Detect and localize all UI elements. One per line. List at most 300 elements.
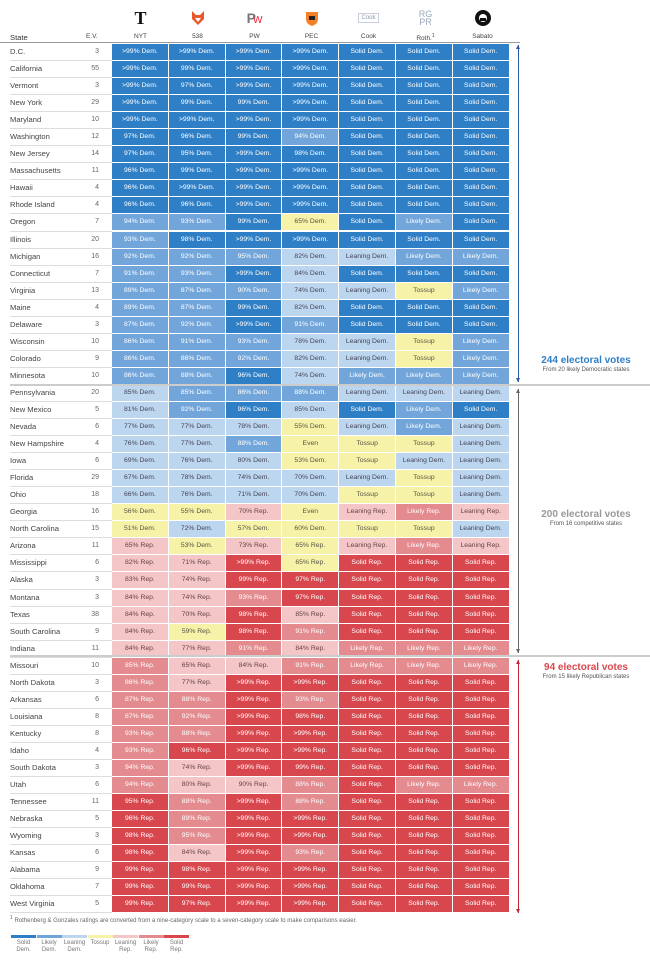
row: Iowa: 76% Dem. [181,457,213,464]
header row: Cook [361,33,376,40]
row: California: 99% Dem. [181,65,213,72]
row: Missouri: Likely Rep. [350,662,384,669]
row: Connecticut: 93% Dem. [181,270,213,277]
row: New Mexico: New Mexico [10,405,51,414]
row: Arizona: Likely Rep. [407,542,441,549]
row: New Hampshire: 4 [95,440,99,447]
legend: Leaning [115,940,136,946]
row: Utah: 6 [95,781,99,788]
row: Pennsylvania: 85% Dem. [181,389,213,396]
row: Georgia: 16 [91,508,99,515]
row: Washington [10,129,509,146]
row: Delaware: Delaware [10,320,42,329]
row: California: California [10,64,42,73]
row: Louisiana: Louisiana [10,712,43,721]
row: Kansas: 93% Rep. [295,849,325,856]
row: Vermont: >99% Dem. [122,82,158,89]
row: Washington: 12 [91,133,99,140]
row: Kentucky: Solid Rep. [465,730,496,737]
row: California: Solid Dem. [407,65,440,72]
row: Illinois: Solid Dem. [350,236,384,243]
row: South Carolina: South Carolina [10,627,60,636]
row: Oklahoma: >99% Rep. [293,883,327,890]
row: Missouri: 65% Rep. [182,662,212,669]
row: Ohio: Tossup [413,491,435,498]
row: Wyoming: Solid Rep. [351,832,383,839]
row: West Virginia: 5 [95,900,99,907]
row: New York: Solid Dem. [407,99,440,106]
row: Nebraska: 89% Rep. [182,815,212,822]
row: Connecticut: Solid Dem. [407,270,440,277]
row: Missouri: 85% Rep. [125,662,155,669]
row: Alabama: Solid Rep. [408,866,440,873]
row: Missouri: 91% Rep. [295,662,325,669]
row: West Virginia: >99% Rep. [237,900,270,907]
row: Illinois: 20 [91,236,99,243]
row: Florida: Florida [10,473,33,482]
row: Oklahoma: >99% Rep. [237,883,270,890]
row: Minnesota: 74% Dem. [294,372,326,379]
row: Florida: Leaning Dem. [346,474,388,481]
row: Illinois: >99% Dem. [292,236,328,243]
row: South Dakota: Solid Rep. [465,764,496,771]
row: New Jersey: Solid Dem. [407,150,440,157]
row: South Carolina: Solid Rep. [351,628,383,635]
row: South Dakota: >99% Rep. [237,764,270,771]
row: New Jersey: Solid Dem. [464,150,497,157]
row: Colorado: 82% Dem. [294,355,326,362]
row: Virginia: Leaning Dem. [346,287,388,294]
row: Idaho: 96% Rep. [182,747,212,754]
row: Pennsylvania: Pennsylvania [10,388,55,397]
row: Kentucky: 93% Rep. [125,730,155,737]
row: Maryland: >99% Dem. [292,116,328,123]
legend: Dem. [42,947,56,953]
row: Wyoming: >99% Rep. [237,832,270,839]
row: New York: >99% Dem. [122,99,158,106]
row: Mississippi: 82% Rep. [125,559,155,566]
row: Missouri [0,658,520,675]
row: West Virginia: West Virginia [10,899,54,908]
row: Nebraska: >99% Rep. [237,815,270,822]
row: Connecticut: 7 [95,270,99,277]
row: Arizona: 65% Rep. [295,542,325,549]
row: Massachusetts: 99% Dem. [181,167,213,174]
row: New Hampshire: 77% Dem. [181,440,213,447]
label: 200 electoral votes: From 16 competitive states [550,521,622,527]
row: Wisconsin: 93% Dem. [238,338,269,345]
row: Nevada: 55% Dem. [294,423,326,430]
row: Maryland: >99% Dem. [122,116,158,123]
row: D.C.: >99% Dem. [236,48,271,55]
row: Ohio [10,487,509,504]
row: Alaska: 74% Rep. [182,576,212,583]
row: Florida: 67% Dem. [124,474,156,481]
row: Indiana: Indiana [10,644,35,653]
row: Nebraska: Solid Rep. [351,815,383,822]
row: Virginia: Likely Dem. [463,287,498,294]
row: Rhode Island: 96% Dem. [181,201,213,208]
row: South Carolina: Solid Rep. [465,628,496,635]
row: New Mexico: 81% Dem. [124,406,156,413]
row: Tennessee: Solid Rep. [465,798,496,805]
row: Arkansas: 6 [95,696,99,703]
row: New Mexico: Solid Dem. [350,406,384,413]
row: Wisconsin: 86% Dem. [124,338,156,345]
row: Virginia: 90% Dem. [238,287,269,294]
row: Arkansas: Solid Rep. [465,696,496,703]
row: Maryland: 10 [91,116,99,123]
row: West Virginia: 99% Rep. [125,900,155,907]
row: Michigan: 92% Dem. [124,253,156,260]
row: Indiana: 91% Rep. [239,645,268,652]
icon: PEC [306,12,318,26]
row: D.C.: >99% Dem. [179,48,215,55]
row: Georgia: Leaning Rep. [347,508,387,515]
row: Maryland [10,112,509,129]
row: Maryland: Solid Dem. [464,116,497,123]
row: Louisiana: 92% Rep. [182,713,212,720]
row: Tennessee [0,794,520,811]
row: New Jersey: >99% Dem. [236,150,271,157]
row: Nebraska: 96% Rep. [125,815,155,822]
row: Massachusetts: Solid Dem. [464,167,497,174]
row: Minnesota: Likely Dem. [463,372,498,379]
row: South Carolina: 59% Rep. [182,628,212,635]
row: Utah: 94% Rep. [125,781,155,788]
row: South Dakota: Solid Rep. [408,764,440,771]
row: Michigan [10,249,509,266]
arrow: republican range [518,660,519,913]
row: Delaware: Solid Dem. [464,321,497,328]
row: Wyoming: Wyoming [10,831,42,840]
row: Minnesota: Minnesota [10,371,45,380]
row: Texas: Solid Rep. [465,611,496,618]
row: Pennsylvania: Leaning Dem. [346,389,388,396]
row: Oklahoma: Solid Rep. [408,883,440,890]
row: Connecticut: Solid Dem. [350,270,384,277]
row: Nevada: 77% Dem. [181,423,213,430]
row: Maine: 82% Dem. [294,304,326,311]
row: Minnesota: 96% Dem. [238,372,269,379]
legend: Dem. [16,947,31,953]
legend: Rep. [170,947,183,953]
row: Minnesota: Likely Dem. [406,372,442,379]
row: Illinois: Solid Dem. [464,236,497,243]
row: Nebraska [0,811,520,828]
row: Virginia [10,283,509,300]
row: Pennsylvania [10,386,509,402]
row: Virginia: Virginia [10,286,35,295]
row: New Mexico: 92% Dem. [181,406,213,413]
row: Maine: 4 [95,304,99,311]
row: Michigan: Likely Dem. [406,253,442,260]
row: California: >99% Dem. [292,65,328,72]
row: New Jersey: 97% Dem. [124,150,156,157]
row: Massachusetts: >99% Dem. [236,167,271,174]
row: North Carolina: 60% Dem. [294,525,326,532]
row: North Carolina: Tossup [356,525,378,532]
row: Pennsylvania: 85% Dem. [124,389,156,396]
row: Utah: Solid Rep. [351,781,383,788]
row: Rhode Island: Solid Dem. [464,201,497,208]
row: California: Solid Dem. [350,65,384,72]
row: New York [10,95,509,112]
row: Kansas: Solid Rep. [465,849,496,856]
row: Oklahoma: Solid Rep. [351,883,383,890]
label: 244 electoral votes: From 20 likely Democratic states [542,367,630,373]
row: Hawaii: 96% Dem. [124,184,156,191]
row: New York: 99% Dem. [181,99,213,106]
row: North Dakota: >99% Rep. [293,679,327,686]
row: Montana: Solid Rep. [465,594,496,600]
row: Colorado [10,351,509,368]
icon: Rothenberg [419,9,432,27]
legend: Leaning [64,940,85,946]
row: Oregon: Likely Dem. [406,218,442,225]
row: Illinois: Solid Dem. [407,236,440,243]
label: 94 electoral votes [522,662,650,680]
row: Colorado: 9 [95,355,99,362]
row: Rhode Island: Solid Dem. [407,201,440,208]
row: New Hampshire [10,436,509,453]
row: Arizona: Leaning Rep. [347,542,387,549]
row: Alabama: 9 [95,866,99,873]
row: South Carolina [0,624,520,641]
row: Massachusetts [10,163,509,180]
row: New Mexico: 96% Dem. [238,406,269,413]
row: Maryland: Maryland [10,115,41,124]
row: Nebraska: Solid Rep. [465,815,496,822]
header row [0,0,520,43]
row: Arizona: 11 [92,542,99,549]
row: New Jersey: 14 [91,150,99,157]
row: D.C. [10,44,509,61]
row: Oregon: 99% Dem. [238,218,269,225]
row: California: 55 [91,65,99,72]
legend: Likely [41,940,57,946]
row: Idaho: >99% Rep. [237,747,270,754]
row: Vermont: 3 [95,82,99,89]
row: California: Solid Dem. [464,65,497,72]
row: Massachusetts: >99% Dem. [292,167,328,174]
row: Kentucky: 88% Rep. [182,730,212,737]
row: North Dakota: Solid Rep. [351,679,383,686]
row: Arkansas: >99% Rep. [237,696,270,703]
header row: 538 [192,33,203,40]
row: Hawaii: 4 [95,184,99,191]
row: North Dakota: 3 [95,679,99,686]
row: Nevada: 77% Dem. [124,423,156,430]
row: Ohio: 66% Dem. [124,491,156,498]
row: Arizona: 65% Rep. [125,542,155,549]
row: Oregon: Solid Dem. [464,218,497,225]
arrow: competitive range [518,389,519,653]
row: Florida: 78% Dem. [181,474,213,481]
row: North Carolina: North Carolina [10,524,59,533]
icon: Rothenberg: RG [419,9,432,19]
row: Tennessee: >99% Rep. [237,798,270,805]
row: Kansas: Solid Rep. [351,849,383,856]
row: Arkansas [0,692,520,709]
row: Florida: 74% Dem. [238,474,269,481]
row: Mississippi: 6 [95,559,99,566]
row: Massachusetts: 11 [92,167,99,174]
row: Idaho: 93% Rep. [125,747,155,754]
row: Maryland: >99% Dem. [179,116,215,123]
row: Hawaii: Solid Dem. [350,184,384,191]
row: Arizona [10,538,509,555]
row: Utah: 80% Rep. [182,781,212,788]
row: Texas: Solid Rep. [408,611,440,618]
row: Tennessee: Solid Rep. [408,798,440,805]
row: Michigan: Michigan [10,252,40,261]
row: Iowa: Leaning Dem. [460,457,502,464]
row: North Carolina: 15 [91,525,99,532]
row: Michigan: 95% Dem. [238,253,269,260]
legend: Solid [170,940,183,946]
row: North Carolina: Tossup [413,525,435,532]
row: Mississippi: Solid Rep. [351,559,383,566]
row: Kentucky [0,726,520,743]
row: Maine: 87% Dem. [181,304,213,311]
row: Alaska: Solid Rep. [408,576,440,583]
row: Pennsylvania: 88% Dem. [294,389,326,396]
row: Delaware: 87% Dem. [124,321,156,328]
row: Tennessee: 88% Rep. [295,798,325,805]
row: North Dakota: 86% Rep. [125,679,155,686]
row: Arkansas: 88% Rep. [182,696,212,703]
row: Wyoming: >99% Rep. [293,832,327,839]
row: Nevada: 6 [95,423,99,430]
legend: Likely [143,940,159,946]
row: Arkansas: 87% Rep. [125,696,155,703]
row: Connecticut: Solid Dem. [464,270,497,277]
row: North Carolina [10,521,509,538]
row: Oklahoma: 99% Rep. [182,883,212,890]
row: Arkansas: Solid Rep. [408,696,440,703]
row: Maryland: Solid Dem. [350,116,384,123]
row: Wyoming: 95% Rep. [182,832,212,839]
row: Vermont: 97% Dem. [181,82,213,89]
row: Delaware: 3 [95,321,99,328]
row: Tennessee: 88% Rep. [182,798,212,805]
row: Wisconsin: Wisconsin [10,337,45,346]
row: Vermont: Solid Dem. [407,82,440,89]
row: D.C.: >99% Dem. [292,48,328,55]
row: Louisiana: >99% Rep. [237,713,270,720]
row: Mississippi: 65% Rep. [295,559,325,566]
row: Virginia: 74% Dem. [294,287,326,294]
row: Oregon [10,214,509,232]
row: Utah: 90% Rep. [239,781,268,788]
row: Wisconsin: 10 [91,338,99,345]
row: Connecticut [10,266,509,283]
row: Kentucky: Solid Rep. [408,730,440,737]
row: Colorado: 92% Dem. [238,355,269,362]
row: Rhode Island [10,197,509,214]
row: Washington: 97% Dem. [124,133,156,140]
row: Colorado: Likely Dem. [463,355,498,362]
row: New Mexico: 85% Dem. [294,406,326,413]
row: North Dakota: 77% Rep. [182,679,212,686]
row: Nevada: Nevada [10,422,36,431]
row: Connecticut: 84% Dem. [294,270,326,277]
row: Nebraska: >99% Rep. [293,815,327,822]
row: Pennsylvania: Leaning Dem. [403,389,445,396]
row: Maine: Solid Dem. [407,304,440,311]
row: Kansas [0,845,520,862]
row: Louisiana: 98% Rep. [295,713,325,720]
row: Idaho: Solid Rep. [351,747,383,754]
row: Kentucky: Solid Rep. [351,730,383,737]
row: West Virginia: Solid Rep. [465,900,496,907]
row: Illinois: Illinois [10,235,31,244]
row: California: >99% Dem. [236,65,271,72]
row: New York: New York [10,98,42,107]
row: Tennessee: Tennessee [10,797,47,806]
row: West Virginia [0,896,520,913]
row: North Dakota: Solid Rep. [465,679,496,686]
row: Colorado: Colorado [10,354,41,363]
row: Iowa: 69% Dem. [124,457,156,464]
row: New York: 99% Dem. [238,99,269,106]
row: Michigan: 82% Dem. [294,253,326,260]
row: Connecticut: >99% Dem. [236,270,271,277]
row: New Jersey [10,146,509,163]
legend [11,935,190,954]
row: Nevada: Leaning Dem. [460,423,502,430]
row: Florida: Tossup [413,474,435,481]
row: Georgia [10,504,509,521]
row: Montana: Solid Rep. [408,594,440,600]
row: Virginia: 13 [91,287,99,294]
row: Kansas: Kansas [10,848,35,857]
row: Utah: Utah [10,780,26,789]
row: Missouri: Missouri [10,661,38,670]
row: Alabama: Alabama [10,865,40,874]
row: Georgia: Even [303,508,318,515]
row: Wisconsin: Tossup [413,338,435,345]
row: Nebraska: Solid Rep. [408,815,440,822]
label: 244 electoral votes [522,355,650,373]
row: Massachusetts: 96% Dem. [124,167,156,174]
row: Kansas: 84% Rep. [182,849,212,856]
row: Arizona: 73% Rep. [239,542,268,549]
row: Louisiana: 8 [95,713,99,720]
row: Virginia: 89% Dem. [124,287,156,294]
row: Tennessee: 11 [92,798,99,805]
row: Minnesota: 86% Dem. [124,372,156,379]
row: Vermont: Solid Dem. [350,82,384,89]
row: Missouri: 84% Rep. [239,662,268,669]
row: Michigan: Likely Dem. [463,253,498,260]
row: North Dakota [0,675,520,692]
row: Oregon: Solid Dem. [350,218,384,225]
row: D.C.: Solid Dem. [407,48,440,55]
row: Nebraska: 5 [95,815,99,822]
row: Alabama: 99% Rep. [125,866,155,873]
legend: Tossup [90,940,110,946]
row: Rhode Island: 96% Dem. [124,201,156,208]
row: Tennessee: Solid Rep. [351,798,383,805]
row: Washington: Solid Dem. [407,133,440,140]
row: South Dakota: 99% Rep. [295,764,325,771]
legend: Dem. [67,947,82,953]
row: South Dakota: 74% Rep. [182,764,212,771]
row: Ohio: Tossup [356,491,378,498]
row: Minnesota [10,368,509,384]
